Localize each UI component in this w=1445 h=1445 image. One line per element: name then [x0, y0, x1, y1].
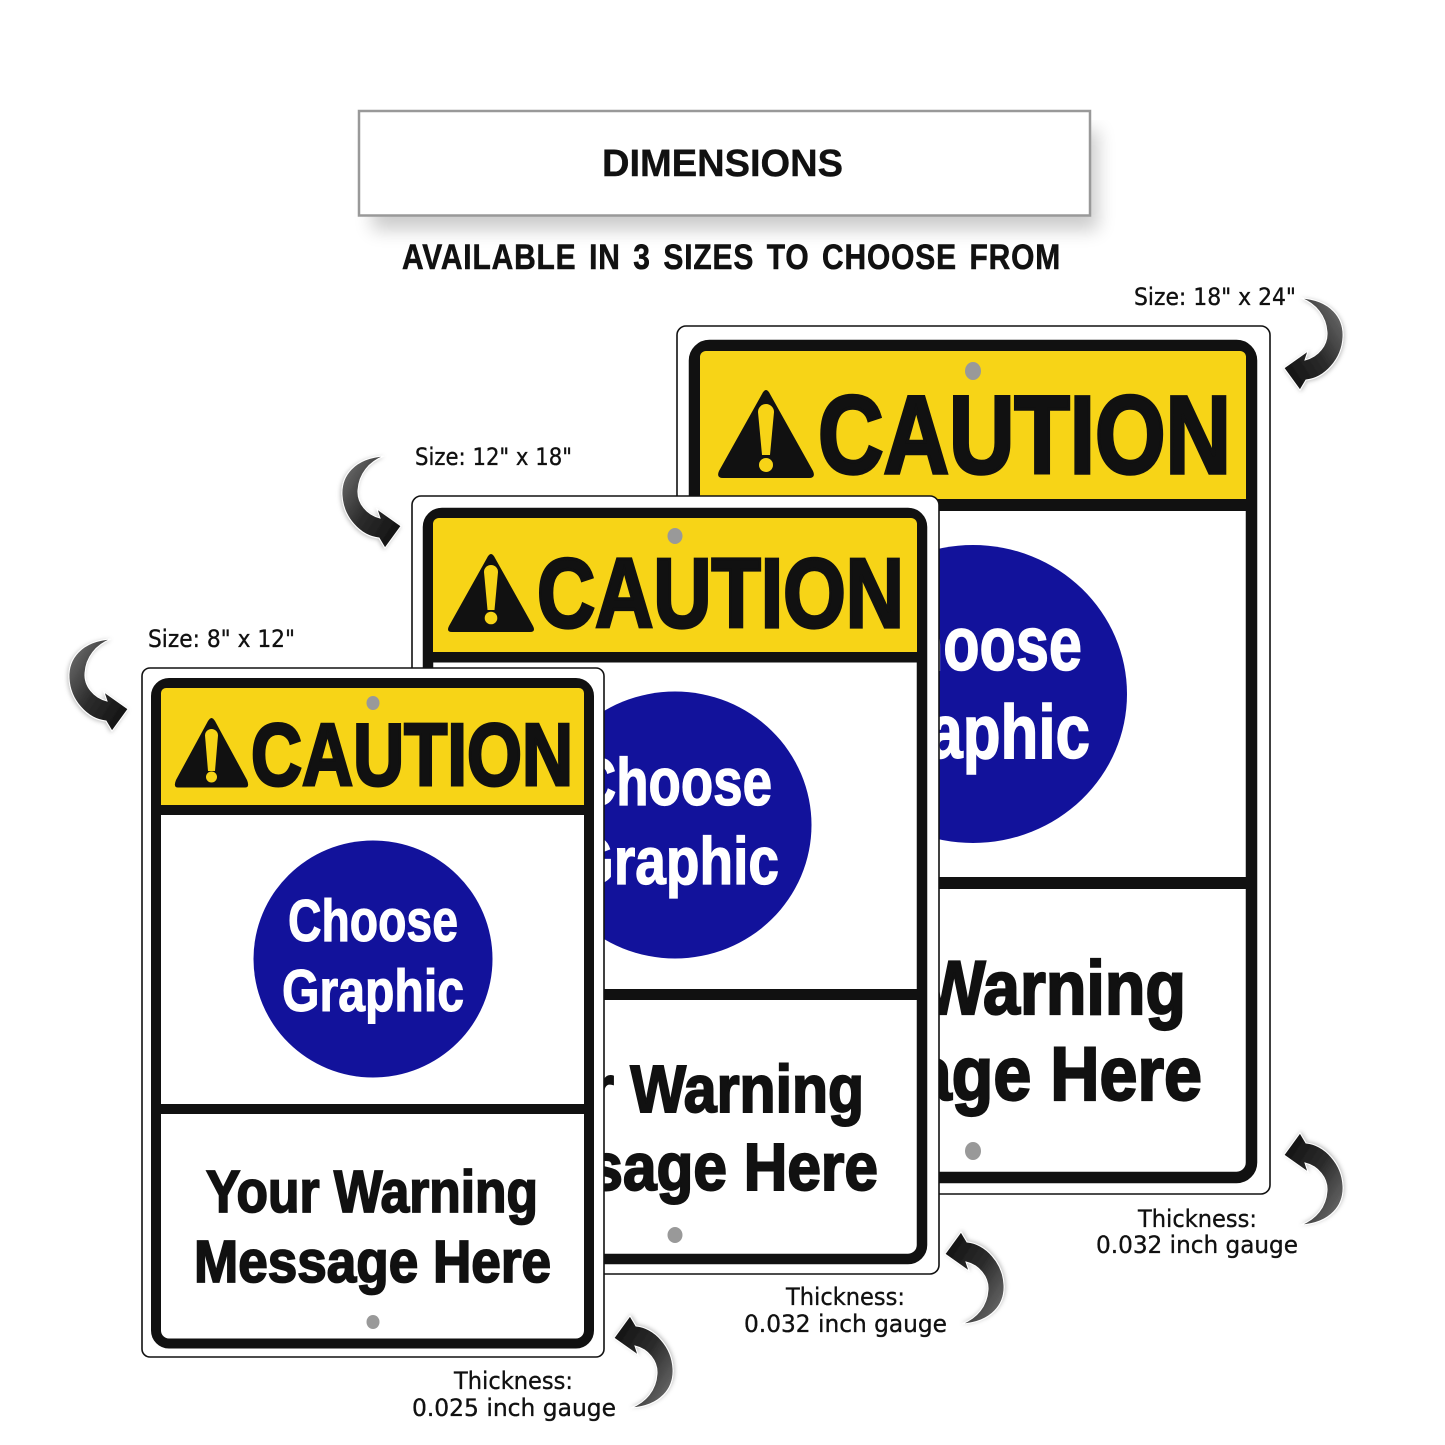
thickness label: large sign: 0.032 inch gauge	[1096, 1231, 1298, 1259]
graphic circle	[538, 692, 812, 958]
graphic circle: Graphic	[856, 690, 1090, 775]
subtitle: AVAILABLE IN 3 SIZES TO CHOOSE FROM	[402, 238, 1061, 277]
warning message: Message Here	[743, 1032, 1202, 1117]
arrow: thickness small	[614, 1316, 673, 1408]
thickness label: medium sign	[744, 1283, 947, 1338]
caution header: CAUTION	[537, 538, 904, 648]
icon: warning triangle	[175, 718, 248, 788]
warning message: Message Here	[194, 1229, 551, 1295]
graphic circle: Choose	[864, 602, 1082, 687]
caution header	[428, 518, 922, 662]
warning message: Message Here	[472, 1130, 878, 1205]
title box: dimensions	[359, 111, 1098, 230]
size label: 8 x 12: Size: 8" x 12"	[148, 625, 295, 653]
graphic circle	[254, 840, 492, 1078]
thickness label: medium sign: Thickness:	[785, 1283, 905, 1311]
graphic circle	[819, 545, 1127, 843]
arrow: size 18 x 24	[1284, 298, 1343, 390]
warning message: Your Warning	[206, 1159, 538, 1225]
graphic circle: Choose	[578, 745, 772, 820]
warning message	[743, 946, 1202, 1117]
thickness label: small sign: 0.025 inch gauge	[412, 1394, 616, 1422]
thickness label: small sign: Thickness:	[453, 1367, 573, 1395]
warning message: Your Warning	[484, 1052, 864, 1127]
warning message	[472, 1052, 878, 1205]
icon: warning triangle	[718, 390, 814, 478]
panel: 8 x 12 sign	[142, 668, 604, 1357]
sign border	[694, 346, 1252, 1178]
sign plate	[142, 668, 604, 1357]
panel: 12 x 18 sign	[412, 496, 939, 1274]
arrow: thickness large	[1284, 1133, 1343, 1225]
icon: warning triangle	[448, 554, 534, 632]
thickness label: small sign	[412, 1367, 616, 1422]
graphic circle: Choose	[288, 888, 458, 954]
sign plate	[412, 496, 939, 1274]
arrow: size 12 x 18	[342, 456, 401, 548]
size label: 18 x 24: Size: 18" x 24"	[1134, 283, 1296, 311]
thickness label: large sign	[1096, 1205, 1298, 1259]
thickness label: medium sign: 0.032 inch gauge	[744, 1310, 947, 1338]
caution header: CAUTION	[818, 374, 1231, 497]
caution header: CAUTION	[251, 705, 573, 804]
warning message: Your Warning	[758, 946, 1186, 1031]
title box: dimensions: DIMENSIONS	[602, 143, 843, 185]
thickness label: large sign: Thickness:	[1137, 1205, 1257, 1233]
arrow: size 8 x 12	[69, 639, 128, 731]
sign border	[156, 683, 589, 1344]
warning message	[194, 1159, 551, 1295]
sign border	[428, 513, 922, 1259]
sign plate	[677, 326, 1270, 1194]
size label: 12 x 18: Size: 12" x 18"	[415, 443, 572, 471]
arrow: thickness medium	[945, 1232, 1004, 1324]
graphic circle: Graphic	[571, 824, 779, 899]
graphic circle: Graphic	[282, 958, 464, 1024]
caution header	[156, 688, 589, 815]
panel: 18 x 24 sign	[677, 326, 1270, 1194]
caution header	[694, 351, 1252, 511]
